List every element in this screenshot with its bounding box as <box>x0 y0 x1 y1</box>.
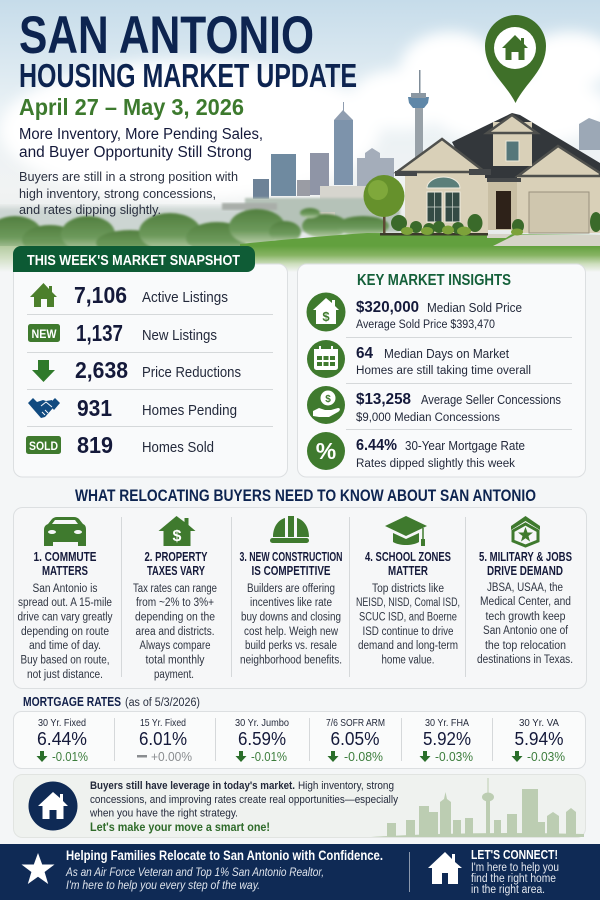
insight: median sold price: Average Sold Price $393,470 <box>356 319 495 331</box>
tip 5: military and jobs <box>477 516 573 666</box>
stat: active listings: Active Listings <box>142 290 228 306</box>
rate: 30 yr fixed: 30 Yr. Fixed <box>38 717 86 729</box>
insight: mortgage rate <box>356 437 525 470</box>
tip 3: new construction: buy downs and closing <box>241 612 341 624</box>
rate: 30 yr jumbo <box>235 717 289 764</box>
callout text: Let's make your move a smart one! <box>90 820 270 834</box>
rate: 30 yr fixed <box>36 717 88 764</box>
icon: hard hat <box>270 516 309 543</box>
tip 2: property taxes: total monthly <box>146 654 205 666</box>
icon: house dollar: $ <box>322 309 330 324</box>
icon: navy house circle <box>28 782 78 830</box>
panel: relocation tips <box>14 508 586 688</box>
rate: 7/6 sofr arm: -0.08% <box>344 750 383 764</box>
tip 1: commute: Buy based on route, <box>20 654 110 666</box>
icon: house <box>30 283 57 307</box>
stat: active listings <box>74 282 228 308</box>
rate: 30 yr fha <box>420 717 473 764</box>
tip 4: school zones: 4. SCHOOL ZONES <box>365 550 451 564</box>
stat: active listings: 7,106 <box>74 282 127 308</box>
callout text: High inventory, strong <box>298 780 394 792</box>
tip 2: property taxes: from ~2% to 3%+ <box>136 597 214 609</box>
stat: homes pending: Homes Pending <box>142 403 237 419</box>
icon: footer house <box>428 852 462 884</box>
stat: price reductions: 2,638 <box>75 357 128 383</box>
heading: mortgage rates: MORTGAGE RATES <box>23 695 121 709</box>
stat: price reductions <box>75 357 241 383</box>
tip 4: school zones: demand and long-term <box>358 640 458 652</box>
insight: days on market: Median Days on Market <box>384 347 509 361</box>
icon: calendar <box>307 340 345 378</box>
rate: 15 yr fixed <box>137 717 192 764</box>
stat: new listings <box>76 320 217 346</box>
connect text: I'm here to help you <box>471 862 559 874</box>
tree <box>364 175 404 233</box>
stat: homes sold <box>77 432 214 458</box>
insight: days on market <box>356 345 531 377</box>
tip 1: commute: MATTERS <box>42 564 88 578</box>
tip 3: new construction: cost help. Weigh new <box>244 626 339 638</box>
connect text: in the right area. <box>471 884 545 896</box>
icon: tower of the americas <box>408 70 429 157</box>
rate: 30 yr jumbo: 30 Yr. Jumbo <box>235 717 289 729</box>
tip 4: school zones: NEISD, NISD, Comal ISD, <box>356 597 460 609</box>
rate: 7/6 sofr arm: 7/6 SOFR ARM <box>326 717 385 729</box>
icon: new badge: NEW <box>32 327 57 341</box>
date line: April 27 – May 3, 2026 <box>19 94 244 120</box>
heading: snapshot: THIS WEEK'S MARKET SNAPSHOT <box>27 252 240 269</box>
rate: 30 yr fha: -0.03% <box>435 750 473 764</box>
tip 4: school zones: ISD continue to drive <box>362 626 454 638</box>
tip 5: military and jobs: San Antonio one of <box>483 625 569 637</box>
rate: 30 yr va: -0.03% <box>527 750 565 764</box>
tip 1: commute: drive can vary greatly <box>18 612 113 624</box>
footer message: I'm here to help you every step of the way. <box>66 878 260 892</box>
tip 4: school zones: home value. <box>382 654 434 666</box>
icon: star <box>21 853 54 884</box>
rate: 30 yr va: 30 Yr. VA <box>519 717 559 729</box>
tip 1: commute: not just distance. <box>27 669 103 681</box>
heading: mortgage rates <box>23 695 200 709</box>
insight: mortgage rate: 6.44% <box>356 437 397 454</box>
tip 3: new construction: 3. NEW CONSTRUCTION <box>240 550 342 564</box>
footer band <box>0 844 600 900</box>
tip 1: commute: spread out. A 15-mile <box>18 597 112 609</box>
distant city haze <box>0 198 400 235</box>
tip 3: new construction: neighborhood benefits. <box>240 654 342 666</box>
tip 1: commute: 1. COMMUTE <box>34 550 96 564</box>
stat: homes sold: Homes Sold <box>142 440 214 456</box>
icon: down arrow <box>32 360 55 382</box>
tip 3: new construction: Builders are offering <box>247 583 335 595</box>
tip 2: property taxes: payment. <box>154 669 194 681</box>
icon: house dollar <box>158 516 196 546</box>
callout text <box>89 780 398 834</box>
heading: insights: KEY MARKET INSIGHTS <box>357 272 511 289</box>
house <box>380 113 600 236</box>
callout text: when you have the right strategy. <box>89 808 238 820</box>
intro text: high inventory, strong concessions, <box>19 186 216 201</box>
tip 2: property taxes: 2. PROPERTY <box>144 550 208 564</box>
panel: mortgage rates table <box>14 712 586 768</box>
insight: median sold price <box>356 299 522 331</box>
rate: 30 yr va: 5.94% <box>514 728 564 749</box>
icon: new badge <box>28 324 60 342</box>
icon: sold badge: SOLD <box>29 439 58 453</box>
callout text: Buyers still have leverage in today's market. <box>90 780 295 792</box>
subtitle: and Buyer Opportunity Still Strong <box>19 144 252 161</box>
tip 2: property taxes: depending on the <box>135 612 215 624</box>
tip 2: property taxes <box>133 516 217 681</box>
rate: 30 yr fixed: 6.44% <box>37 728 87 749</box>
tip 3: new construction <box>240 516 342 666</box>
stat: price reductions: Price Reductions <box>142 365 241 381</box>
footer message: As an Air Force Veteran and Top 1% San Antonio Realtor, <box>65 865 324 879</box>
icon: handshake <box>28 398 60 418</box>
tip 1: commute: San Antonio is <box>32 583 98 595</box>
stat: new listings: 1,137 <box>76 320 123 346</box>
icon: sold badge <box>26 436 61 454</box>
rate: 30 yr fixed: -0.01% <box>52 750 88 764</box>
footer message: Helping Families Relocate to San Antonio with Confidence. <box>66 848 383 863</box>
title <box>19 6 357 94</box>
connect text: find the right home <box>471 873 556 885</box>
rate: 7/6 sofr arm: 6.05% <box>330 728 380 749</box>
insight: days on market: 64 <box>356 345 373 362</box>
rate: 7/6 sofr arm <box>326 717 385 764</box>
rate: 30 yr va <box>512 717 565 764</box>
tip 4: school zones: SCUC ISD, and Boerne <box>359 612 457 624</box>
insight: median sold price: Median Sold Price <box>427 301 522 315</box>
tip 1: commute: and time of day. <box>29 640 101 652</box>
stat: homes sold: 819 <box>77 432 113 458</box>
panel: buyers callout <box>14 774 586 838</box>
insight: days on market: Homes are still taking time overall <box>356 365 531 377</box>
rate: 15 yr fixed: +0.00% <box>151 750 192 764</box>
tip 5: military and jobs: Medical Center, and <box>480 596 571 608</box>
tip 2: property taxes: area and districts. <box>136 626 214 638</box>
panel: market snapshot <box>13 246 288 477</box>
tip 5: military and jobs: the top relocation <box>485 640 566 652</box>
lawn <box>0 233 600 272</box>
subtitle: More Inventory, More Pending Sales, <box>19 126 263 143</box>
insight: seller concessions: Average Seller Concessions <box>421 393 561 407</box>
intro text: Buyers are still in a strong position with <box>19 169 238 184</box>
rate: 30 yr fha: 5.92% <box>423 728 471 749</box>
tip 2: property taxes: Tax rates can range <box>133 583 217 595</box>
tip 3: new construction: build perks vs. resale <box>245 640 337 652</box>
tip 1: commute: depending on route <box>21 626 109 638</box>
icon: house dollar <box>306 292 346 332</box>
intro text: and rates dipping slightly. <box>19 202 161 217</box>
icon: hand with coin: $ <box>325 394 331 405</box>
rate: 30 yr jumbo: 6.59% <box>238 728 286 749</box>
rate: 15 yr fixed: 6.01% <box>139 728 187 749</box>
icon: graduation cap <box>385 516 427 546</box>
stat: homes pending: 931 <box>77 395 112 421</box>
icon: military badge <box>511 516 540 546</box>
rate: 15 yr fixed: 15 Yr. Fixed <box>140 717 186 729</box>
callout text: concessions, and improving rates create real opportunities—especially <box>90 794 398 806</box>
insight: mortgage rate: 30-Year Mortgage Rate <box>405 439 525 453</box>
intro text <box>19 169 238 217</box>
tip 5: military and jobs: destinations in Texas. <box>477 654 573 666</box>
skyline illustration <box>371 778 584 837</box>
icon: map pin with house <box>485 15 546 103</box>
tip 1: commute <box>18 517 113 681</box>
tip 3: new construction: IS COMPETITIVE <box>252 564 330 578</box>
tip 2: property taxes: Always compare <box>140 640 210 652</box>
tip 4: school zones: MATTER <box>388 564 428 578</box>
tree line <box>0 208 389 256</box>
title: HOUSING MARKET UPDATE <box>19 57 357 94</box>
tip 3: new construction: incentives like rate <box>250 597 332 609</box>
tip 4: school zones <box>356 516 460 666</box>
icon: car <box>44 517 86 546</box>
tip 5: military and jobs: tech growth keep <box>486 611 566 623</box>
tip 4: school zones: Top districts like <box>372 583 444 595</box>
title: SAN ANTONIO <box>19 6 314 65</box>
rate: 30 yr jumbo: -0.01% <box>251 750 287 764</box>
connect text: LET'S CONNECT! <box>471 847 558 862</box>
insight: mortgage rate: Rates dipped slightly this week <box>356 458 515 470</box>
heading: snapshot <box>13 246 255 272</box>
heading: mortgage rates: (as of 5/3/2026) <box>125 697 200 709</box>
panel: key market insights <box>298 264 586 477</box>
tip 5: military and jobs: JBSA, USAA, the <box>487 582 563 594</box>
footer message <box>65 848 383 892</box>
insight: seller concessions <box>356 391 561 424</box>
tip 2: property taxes: TAXES VARY <box>147 564 205 578</box>
insight: seller concessions: $13,258 <box>356 391 411 408</box>
icon: percent <box>307 432 345 470</box>
subtitle <box>19 126 263 161</box>
icon: percent: % <box>316 438 336 464</box>
tip 5: military and jobs: DRIVE DEMAND <box>487 564 563 578</box>
rate: 30 yr fha: 30 Yr. FHA <box>425 717 469 729</box>
insight: seller concessions: $9,000 Median Concessions <box>356 412 500 424</box>
icon: hand with coin <box>307 386 345 424</box>
connect text <box>471 847 559 896</box>
icon: house dollar: $ <box>173 528 182 545</box>
stat: homes pending <box>77 395 237 421</box>
insight: median sold price: $320,000 <box>356 299 419 316</box>
stat: new listings: New Listings <box>142 328 217 344</box>
tip 5: military and jobs: 5. MILITARY & JOBS <box>479 550 572 564</box>
